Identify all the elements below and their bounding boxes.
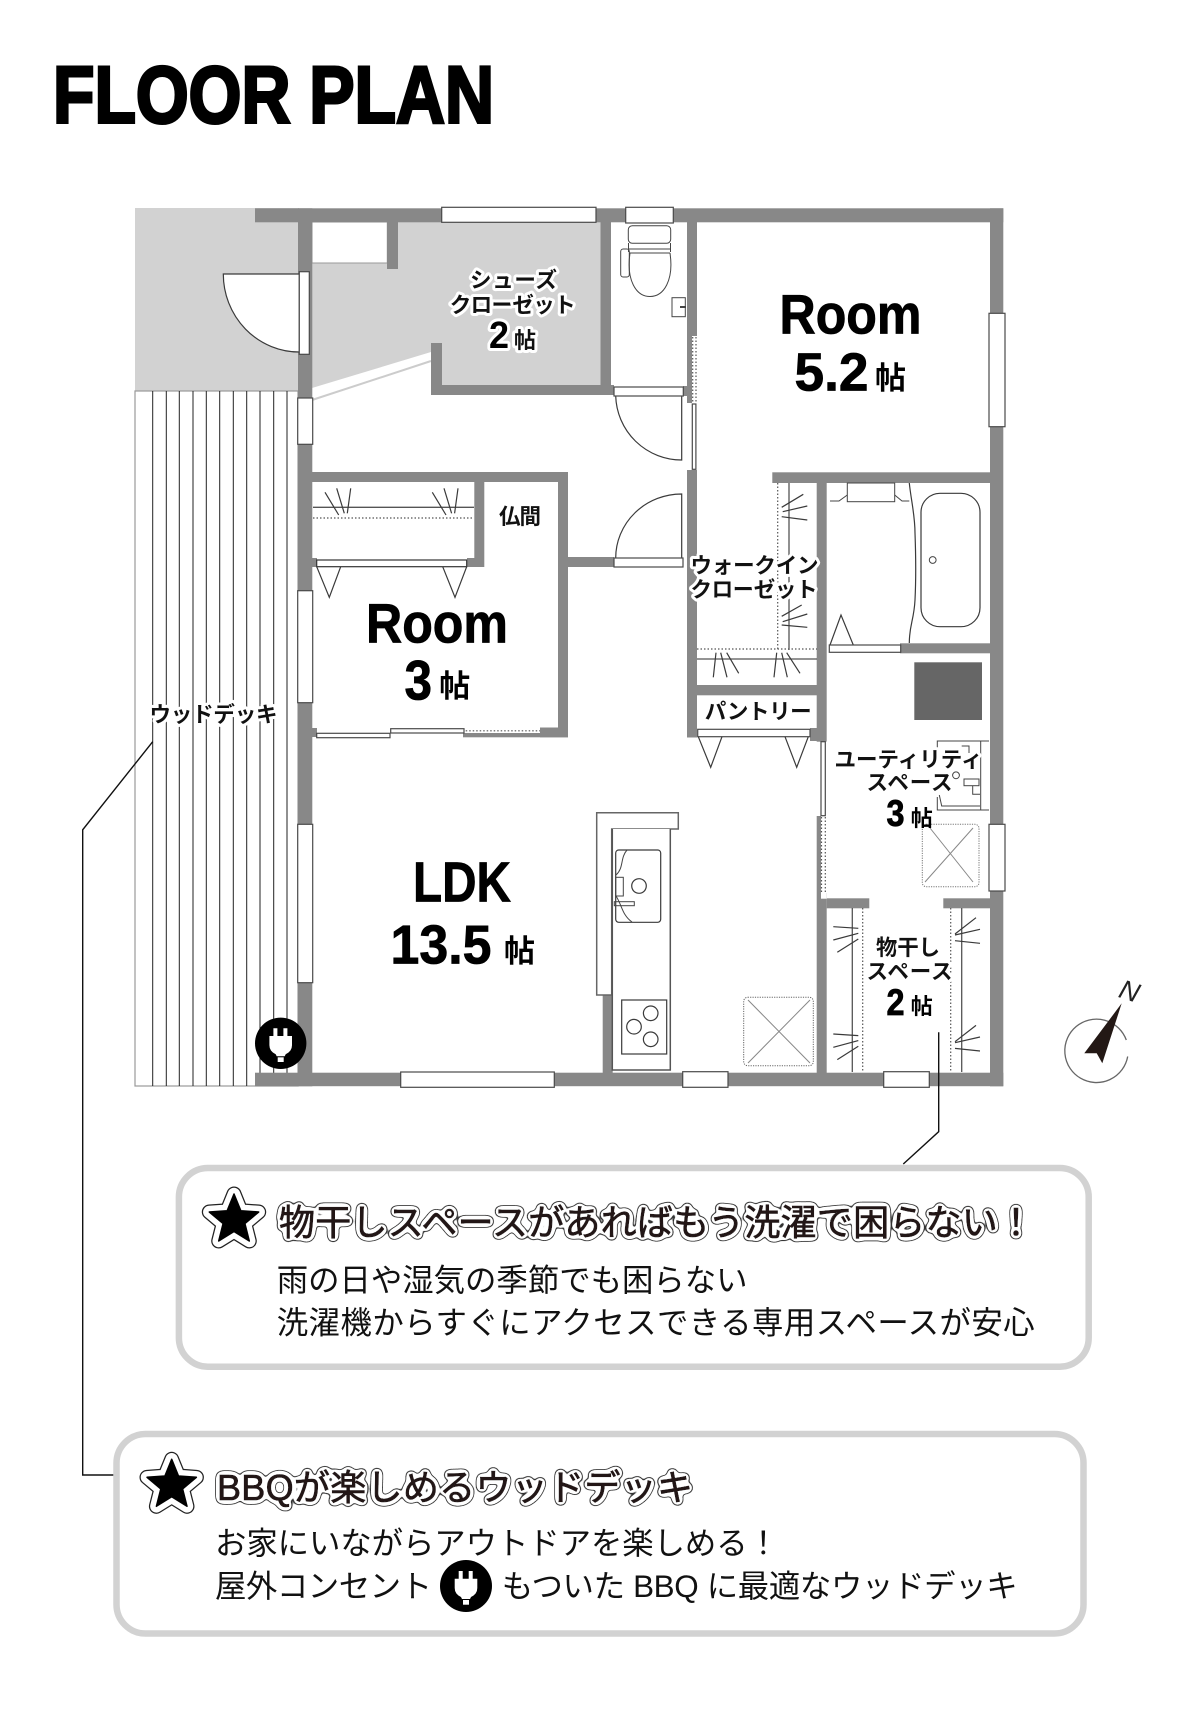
windows (298, 207, 1005, 1087)
utility basin (937, 741, 989, 810)
panel: entrance porch (135, 208, 299, 391)
title: FLOOR PLAN (53, 50, 494, 140)
walls (255, 208, 1003, 1086)
panel: wood deck callout (116, 1434, 1084, 1634)
toilet (621, 226, 686, 317)
washing machine (914, 662, 982, 720)
toilet door (614, 387, 683, 460)
label: room 5.2: 帖 (875, 361, 906, 396)
room 3 sliding doors (317, 729, 540, 738)
icon: outdoor outlet (255, 1018, 306, 1069)
icon: star (209, 1194, 259, 1241)
icon: compass (1065, 974, 1144, 1083)
label: room 5.2 (780, 282, 922, 403)
body text: もついた BBQ に最適なウッドデッキ (502, 1569, 1018, 1604)
label: altar alcove: 仏間 (499, 505, 541, 529)
label: pantry: パントリー (705, 700, 812, 724)
utility ceiling square (922, 824, 979, 887)
label: drying space: スペース (866, 960, 952, 984)
label: walk-in closet (690, 554, 818, 602)
label: walk-in closet: クローゼット (690, 577, 818, 602)
utility sliding door (821, 742, 827, 899)
label: drying space: 物干し (876, 936, 940, 960)
label: utility space: スペース (866, 771, 952, 795)
icon: star (147, 1459, 196, 1506)
label: shoe closet: クローゼット (450, 292, 576, 318)
wood deck (135, 391, 298, 1086)
label: LDK (390, 851, 535, 975)
label: shoe closet (450, 268, 576, 357)
leader line: drying space to panel (903, 1032, 939, 1164)
label: room 5.2: Room (780, 282, 922, 345)
room 3 closet fittings (313, 488, 474, 597)
label: drying space (866, 936, 952, 1023)
icon: outlet (440, 1560, 492, 1612)
leader line: wood deck to panel (83, 742, 153, 1475)
label: utility space: 3 (886, 793, 904, 834)
label: utility space: ユーティリティ (834, 748, 982, 772)
label: room 3: 帖 (439, 669, 470, 704)
entrance door (223, 272, 309, 354)
label: shoe closet: 帖 (514, 328, 536, 353)
label: wood deck: ウッドデッキ (150, 702, 278, 727)
walk-in closet fittings (697, 483, 817, 677)
body text: 雨の日や湿気の季節でも困らない (277, 1263, 748, 1298)
body text: 洗濯機からすぐにアクセスできる専用スペースが安心 (277, 1306, 1035, 1340)
panel: drying space callout (179, 1168, 1089, 1367)
icon: compass: N (1115, 974, 1144, 1009)
kitchen counter (597, 813, 678, 1070)
label: room 3 (366, 591, 508, 711)
body text: 屋外コンセント (215, 1569, 432, 1604)
label: room 3: Room (366, 591, 508, 654)
label: shoe closet: シューズ (470, 268, 557, 292)
body text: お家にいながらアウトドアを楽しめる！ (215, 1526, 779, 1561)
label: walk-in closet: ウォークイン (690, 554, 818, 578)
drying space rods (833, 908, 980, 1072)
label: LDK: 帖 (504, 934, 535, 969)
label: utility space (834, 748, 982, 834)
bath (829, 483, 980, 652)
label: drying space: 2 (886, 982, 904, 1023)
fridge space (744, 997, 813, 1066)
label: room 5.2: 5.2 (794, 343, 868, 403)
closet glass partition line (312, 361, 431, 400)
panel: shoe closet floor (312, 222, 601, 388)
label: room 3: 3 (404, 648, 432, 711)
shoe cupboard (312, 222, 387, 263)
heading: 物干しスペースがあればもう洗濯で困らない！ (279, 1202, 1034, 1243)
pantry door (698, 729, 810, 767)
label: shoe closet: 2 (489, 315, 509, 357)
label: utility space: 帖 (911, 806, 933, 831)
room door (614, 494, 683, 567)
sliding door and dotted track, room 5.2 (687, 336, 697, 470)
label: LDK: 13.5 (390, 913, 492, 975)
label: LDK: LDK (413, 851, 511, 915)
label: drying space: 帖 (911, 994, 933, 1019)
heading: BBQが楽しめるウッドデッキ (217, 1467, 693, 1508)
